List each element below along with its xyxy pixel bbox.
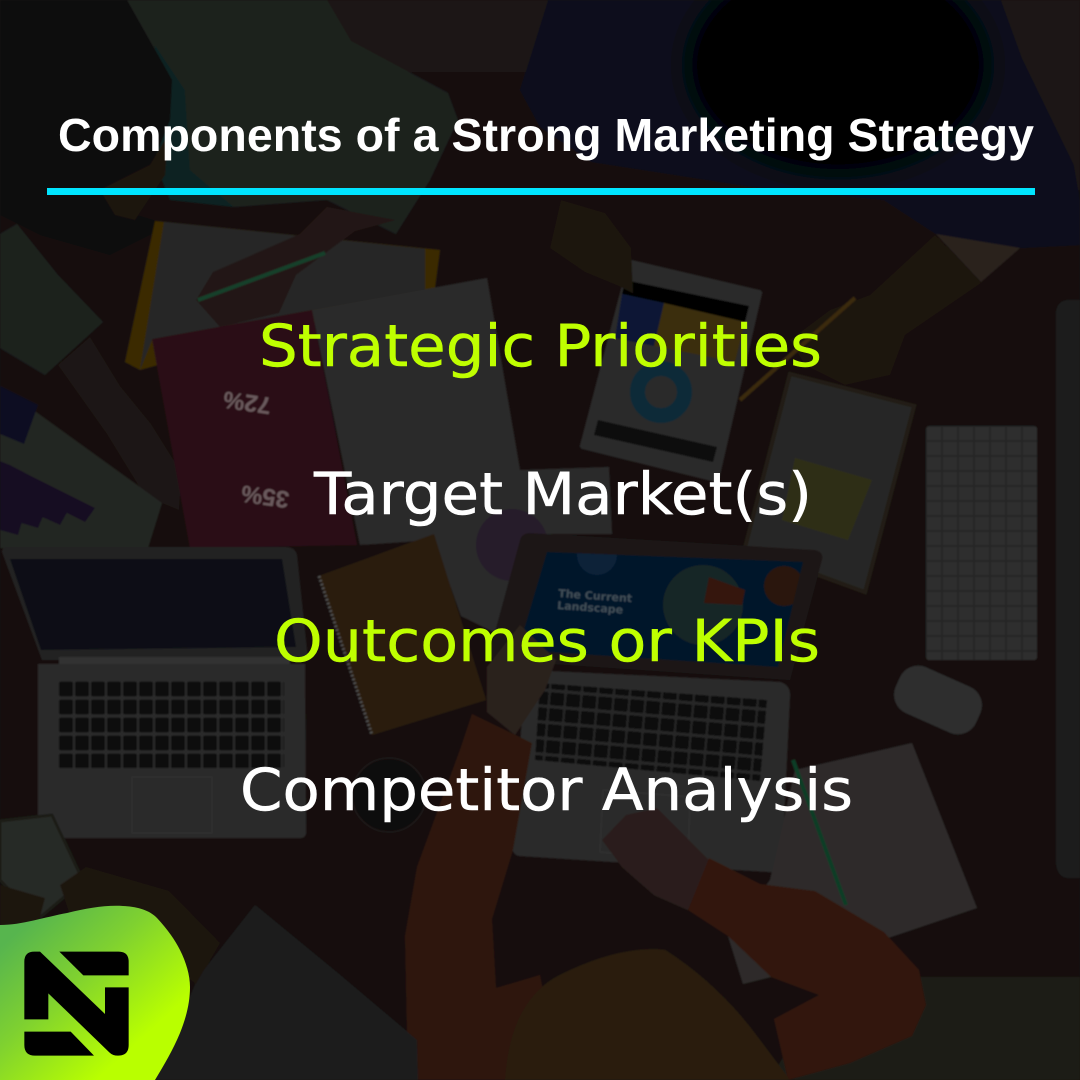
- green pencil lower right: [793, 760, 846, 905]
- histogram paper: [0, 386, 162, 548]
- left laptop keyboard: [58, 680, 284, 768]
- hands on phone: [0, 867, 130, 932]
- list item: Competitor Analysis: Competitor Analysis: [240, 756, 853, 824]
- screen caption: The Current: [558, 587, 632, 605]
- right laptop base: [512, 670, 790, 872]
- left laptop display: [10, 559, 296, 650]
- monitor: [1056, 300, 1080, 878]
- brown notebook: [319, 534, 486, 735]
- person top left: forearm and hand: [58, 337, 181, 510]
- right laptop screen: [518, 552, 803, 667]
- icon: N logo: [24, 952, 129, 1056]
- screen caption second line: Landscape: [557, 599, 624, 617]
- left laptop base: [38, 664, 306, 838]
- person top left: hair: [0, 0, 172, 255]
- woman: sleeve on right: [688, 858, 926, 1080]
- paper chart circle: [476, 509, 548, 581]
- phone: [0, 815, 83, 919]
- report figure 72%: 72%: [221, 385, 273, 419]
- right laptop trackpad: [600, 790, 690, 860]
- left laptop trackpad: [132, 777, 212, 833]
- spiral binding: [319, 576, 372, 735]
- logo badge: [0, 906, 190, 1080]
- histogram bars: [0, 461, 95, 535]
- arm of jacket person: [86, 867, 220, 984]
- right laptop lid: [490, 533, 822, 680]
- tablet top band: [622, 280, 749, 322]
- histogram header: [0, 386, 38, 444]
- screen top donut: [577, 553, 617, 575]
- floor bottom right: [770, 977, 1080, 1080]
- person top left: teal collar: [150, 45, 234, 207]
- red report: [152, 310, 357, 548]
- person top left: shirt: [127, 0, 458, 234]
- white paper lower right: [728, 743, 977, 984]
- mouse: [888, 659, 988, 741]
- center paper with chart: [360, 467, 612, 643]
- green blob: [0, 906, 190, 1080]
- tablet screen: [594, 280, 749, 462]
- left laptop hinge: [59, 657, 290, 667]
- screen graphics: [577, 553, 800, 646]
- yellow pencil: [740, 298, 855, 400]
- green pencil: [198, 253, 325, 300]
- person top left: left sleeve: [0, 224, 103, 375]
- orange notebook cover: [125, 221, 440, 370]
- person top left: face: [100, 135, 168, 220]
- coffee cup lid: [352, 758, 426, 832]
- hand holding laptop lid: [487, 625, 556, 735]
- list item: Strategic Priorities: Strategic Priorities: [259, 312, 822, 380]
- woman: hair: [505, 949, 790, 1080]
- person top right: dark shirt: [520, 0, 1080, 248]
- white notebook page: [312, 278, 520, 545]
- tablet blue block: [615, 294, 664, 346]
- left laptop screen: [2, 547, 308, 660]
- list item: Outcomes or KPIs: Outcomes or KPIs: [274, 607, 820, 675]
- light wood floor top: [320, 0, 560, 72]
- screen pie chart: [663, 565, 743, 645]
- person top right: cuff: [936, 234, 1020, 282]
- keyboard: [926, 426, 1037, 660]
- right laptop keyboard: [535, 683, 767, 781]
- tablet yellow block: [654, 303, 745, 362]
- woman: sleeve on left: [405, 714, 560, 1080]
- grid notebook page: [140, 222, 425, 370]
- screen pie slice: [704, 577, 745, 605]
- tablet donut chart: [638, 368, 684, 416]
- cyan title rule: [47, 188, 1035, 195]
- report figure 35%: 35%: [239, 479, 291, 513]
- screen side circle: [764, 566, 804, 606]
- tablet: [583, 263, 759, 479]
- hand writing with pencil: [196, 207, 396, 327]
- clipboard: [745, 374, 914, 592]
- tablet bottom band: [594, 420, 717, 462]
- pointing hand: [550, 200, 633, 293]
- right forearm and hand: [790, 235, 981, 385]
- hand on trackpad: [602, 808, 709, 910]
- title: Components of a Strong Marketing Strategy: [58, 109, 1034, 161]
- person top right: head: [688, 0, 988, 173]
- gray jacket person: [155, 905, 418, 1080]
- wood floor top right: [990, 0, 1080, 190]
- list item: Target Market(s): Target Market(s): [313, 460, 812, 528]
- clipboard yellow note: [782, 458, 872, 540]
